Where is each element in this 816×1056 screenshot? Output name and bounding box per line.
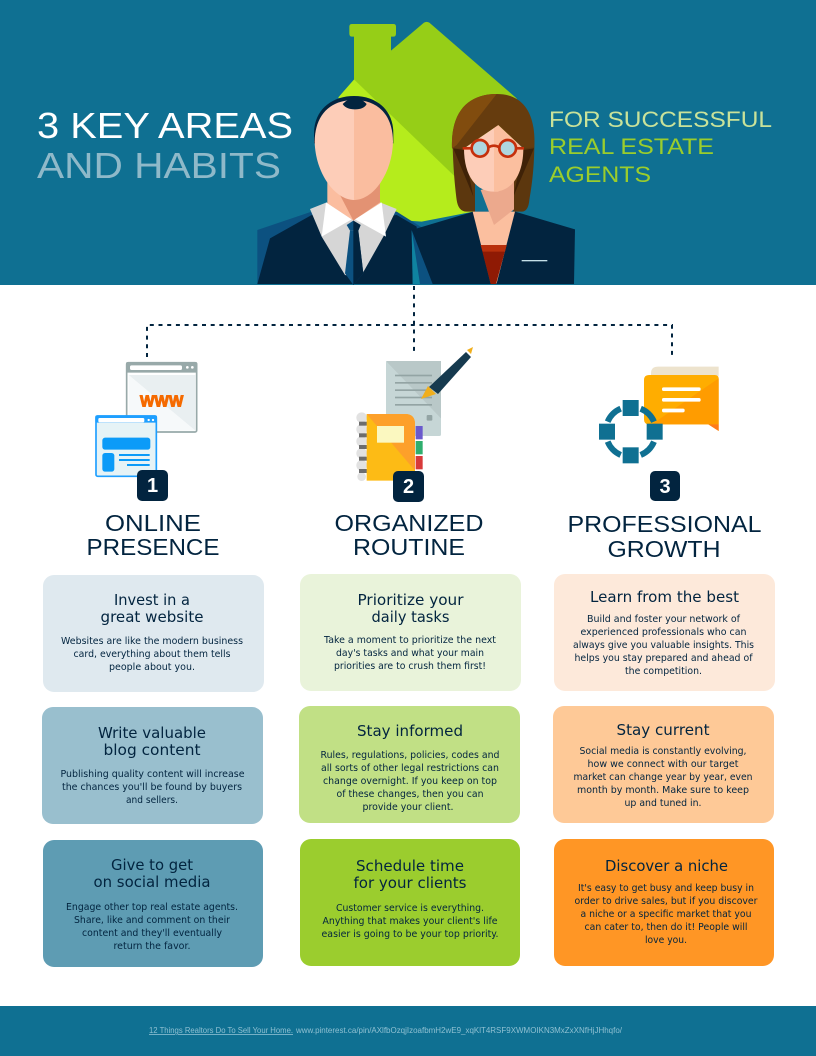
heading: organized routine: ORGANIZED <box>334 510 484 536</box>
panel: invest in a great website: card, everything about them tells <box>74 649 230 660</box>
panel: stay current <box>553 706 774 823</box>
panel: give to get on social media: content and they'll eventually <box>82 928 222 939</box>
panel: give to get on social media: Engage other top real estate agents. <box>66 902 238 913</box>
panel: stay informed: of these changes, then you can <box>336 789 484 800</box>
title <box>37 105 293 186</box>
panel: stay current: Stay current <box>616 721 710 739</box>
panel: stay informed: Stay informed <box>357 722 463 740</box>
icon: house <box>338 22 517 222</box>
panel: discover a niche: can cater to, then do it! People will <box>584 922 748 933</box>
badge 2: 2 <box>403 476 414 498</box>
badge 1: 1 <box>147 475 158 497</box>
badge 1 <box>137 470 168 501</box>
panel: prioritize your daily tasks: priorities are to crush them first! <box>334 661 486 672</box>
panel: prioritize your daily tasks: daily tasks <box>372 608 450 626</box>
panel: prioritize your daily tasks: Prioritize your <box>358 591 464 609</box>
panel: prioritize your daily tasks: day's tasks and what your main <box>336 648 484 659</box>
panel: give to get on social media: on social media <box>94 873 210 891</box>
panel: prioritize your daily tasks: Take a moment to prioritize the next <box>323 635 496 646</box>
panel: discover a niche: order to drive sales, but if you discover <box>574 896 758 907</box>
icon: glasses <box>463 140 524 157</box>
panel: learn from the best: Build and foster your network of <box>587 614 740 625</box>
panel: write valuable blog content: the chances you'll be found by buyers <box>62 782 242 793</box>
panel: schedule time for your clients: for your clients <box>354 874 467 892</box>
heading: online presence <box>86 510 220 560</box>
panel: schedule time for your clients: Schedule time <box>356 857 464 875</box>
panel: give to get on social media <box>43 840 263 967</box>
panel: learn from the best: Learn from the best <box>590 588 739 606</box>
panel: schedule time for your clients: Customer service is everything. <box>336 903 484 914</box>
heading: organized routine: ROUTINE <box>353 534 465 560</box>
panel: invest in a great website: people about you. <box>109 662 195 673</box>
header band <box>0 0 816 285</box>
heading: professional growth: GROWTH <box>608 536 720 562</box>
heading: organized routine <box>334 510 484 560</box>
heading: professional growth: PROFESSIONAL <box>568 511 762 537</box>
panel: stay current: month by month. Make sure to keep <box>577 785 749 796</box>
woman <box>412 94 575 284</box>
panel: write valuable blog content: blog content <box>104 741 201 759</box>
connector lines <box>147 286 672 357</box>
icon: web browsers <box>95 362 197 476</box>
icon: web browsers: WWW <box>140 394 184 411</box>
footer: www.pinterest.ca/pin/AXlfbOzqjIzoafbmH2wE9_xqKlT4RSF9XWMOIKN3MxZxXNfHjJHhqfo/ <box>295 1026 623 1035</box>
panel: learn from the best: experienced professionals who can <box>580 627 746 638</box>
panel: stay informed: change overnight. If you keep on top <box>323 776 497 787</box>
panel: stay current: market can change year by year, even <box>574 772 752 783</box>
panel: learn from the best <box>554 574 775 691</box>
subtitle <box>549 107 772 187</box>
panel: stay informed <box>299 706 520 823</box>
panel: stay informed: all sorts of other legal restrictions can <box>321 763 499 774</box>
panel: schedule time for your clients <box>300 839 520 966</box>
badge 3: 3 <box>659 476 671 498</box>
heading: professional growth <box>568 511 762 562</box>
badge 3 <box>650 471 680 501</box>
badge 2 <box>393 471 424 502</box>
panel: schedule time for your clients: Anything that makes your client's life <box>322 916 498 927</box>
subtitle: AGENTS <box>549 162 651 187</box>
panel: stay informed: Rules, regulations, policies, codes and <box>320 750 500 761</box>
panel: write valuable blog content: and sellers. <box>126 795 178 806</box>
panel: learn from the best: helps you stay prepared and ahead of <box>574 653 753 664</box>
panel: invest in a great website: Invest in a <box>114 591 190 609</box>
heading: online presence: PRESENCE <box>86 534 220 560</box>
panel: invest in a great website: Websites are like the modern business <box>61 636 243 647</box>
footer: 12 Things Realtors Do To Sell Your Home. <box>149 1026 293 1035</box>
panel: discover a niche: love you. <box>645 935 687 946</box>
panel: discover a niche <box>554 839 774 966</box>
panel: discover a niche: Discover a niche <box>605 857 728 875</box>
panel: stay informed: provide your client. <box>362 802 454 813</box>
footer <box>0 1006 816 1056</box>
panel: learn from the best: always give you valuable insights. This <box>573 640 754 651</box>
panel: invest in a great website: great website <box>100 608 204 626</box>
panel: discover a niche: a niche or a specific market that you <box>580 909 752 920</box>
panel: write valuable blog content <box>42 707 263 824</box>
subtitle: FOR SUCCESSFUL <box>549 107 772 132</box>
panel: stay current: Social media is constantly evolving, <box>580 746 746 757</box>
panel: invest in a great website <box>43 575 264 692</box>
panel: stay current: up and tuned in. <box>624 798 702 809</box>
man <box>257 96 422 285</box>
panel: write valuable blog content: Publishing quality content will increase <box>60 769 244 780</box>
title: AND HABITS <box>37 145 281 186</box>
title: 3 KEY AREAS <box>37 105 293 146</box>
panel: give to get on social media: Give to get <box>111 856 193 874</box>
subtitle: REAL ESTATE <box>549 134 714 159</box>
panel: discover a niche: It's easy to get busy and keep busy in <box>578 883 754 894</box>
illustration: agents and house <box>257 22 575 285</box>
heading: online presence: ONLINE <box>105 510 201 536</box>
panel: give to get on social media: return the favor. <box>114 941 190 952</box>
panel: learn from the best: the competition. <box>625 666 702 677</box>
icon: chat bubble and network <box>599 367 719 463</box>
panel: prioritize your daily tasks <box>300 574 521 691</box>
panel: write valuable blog content: Write valuable <box>98 724 206 742</box>
panel: schedule time for your clients: easier is going to be your top priority. <box>322 929 498 940</box>
panel: give to get on social media: Share, like and comment on their <box>74 915 231 926</box>
icon: document, pen and notebook <box>356 347 473 481</box>
panel: stay current: how we connect with our target <box>588 759 739 770</box>
